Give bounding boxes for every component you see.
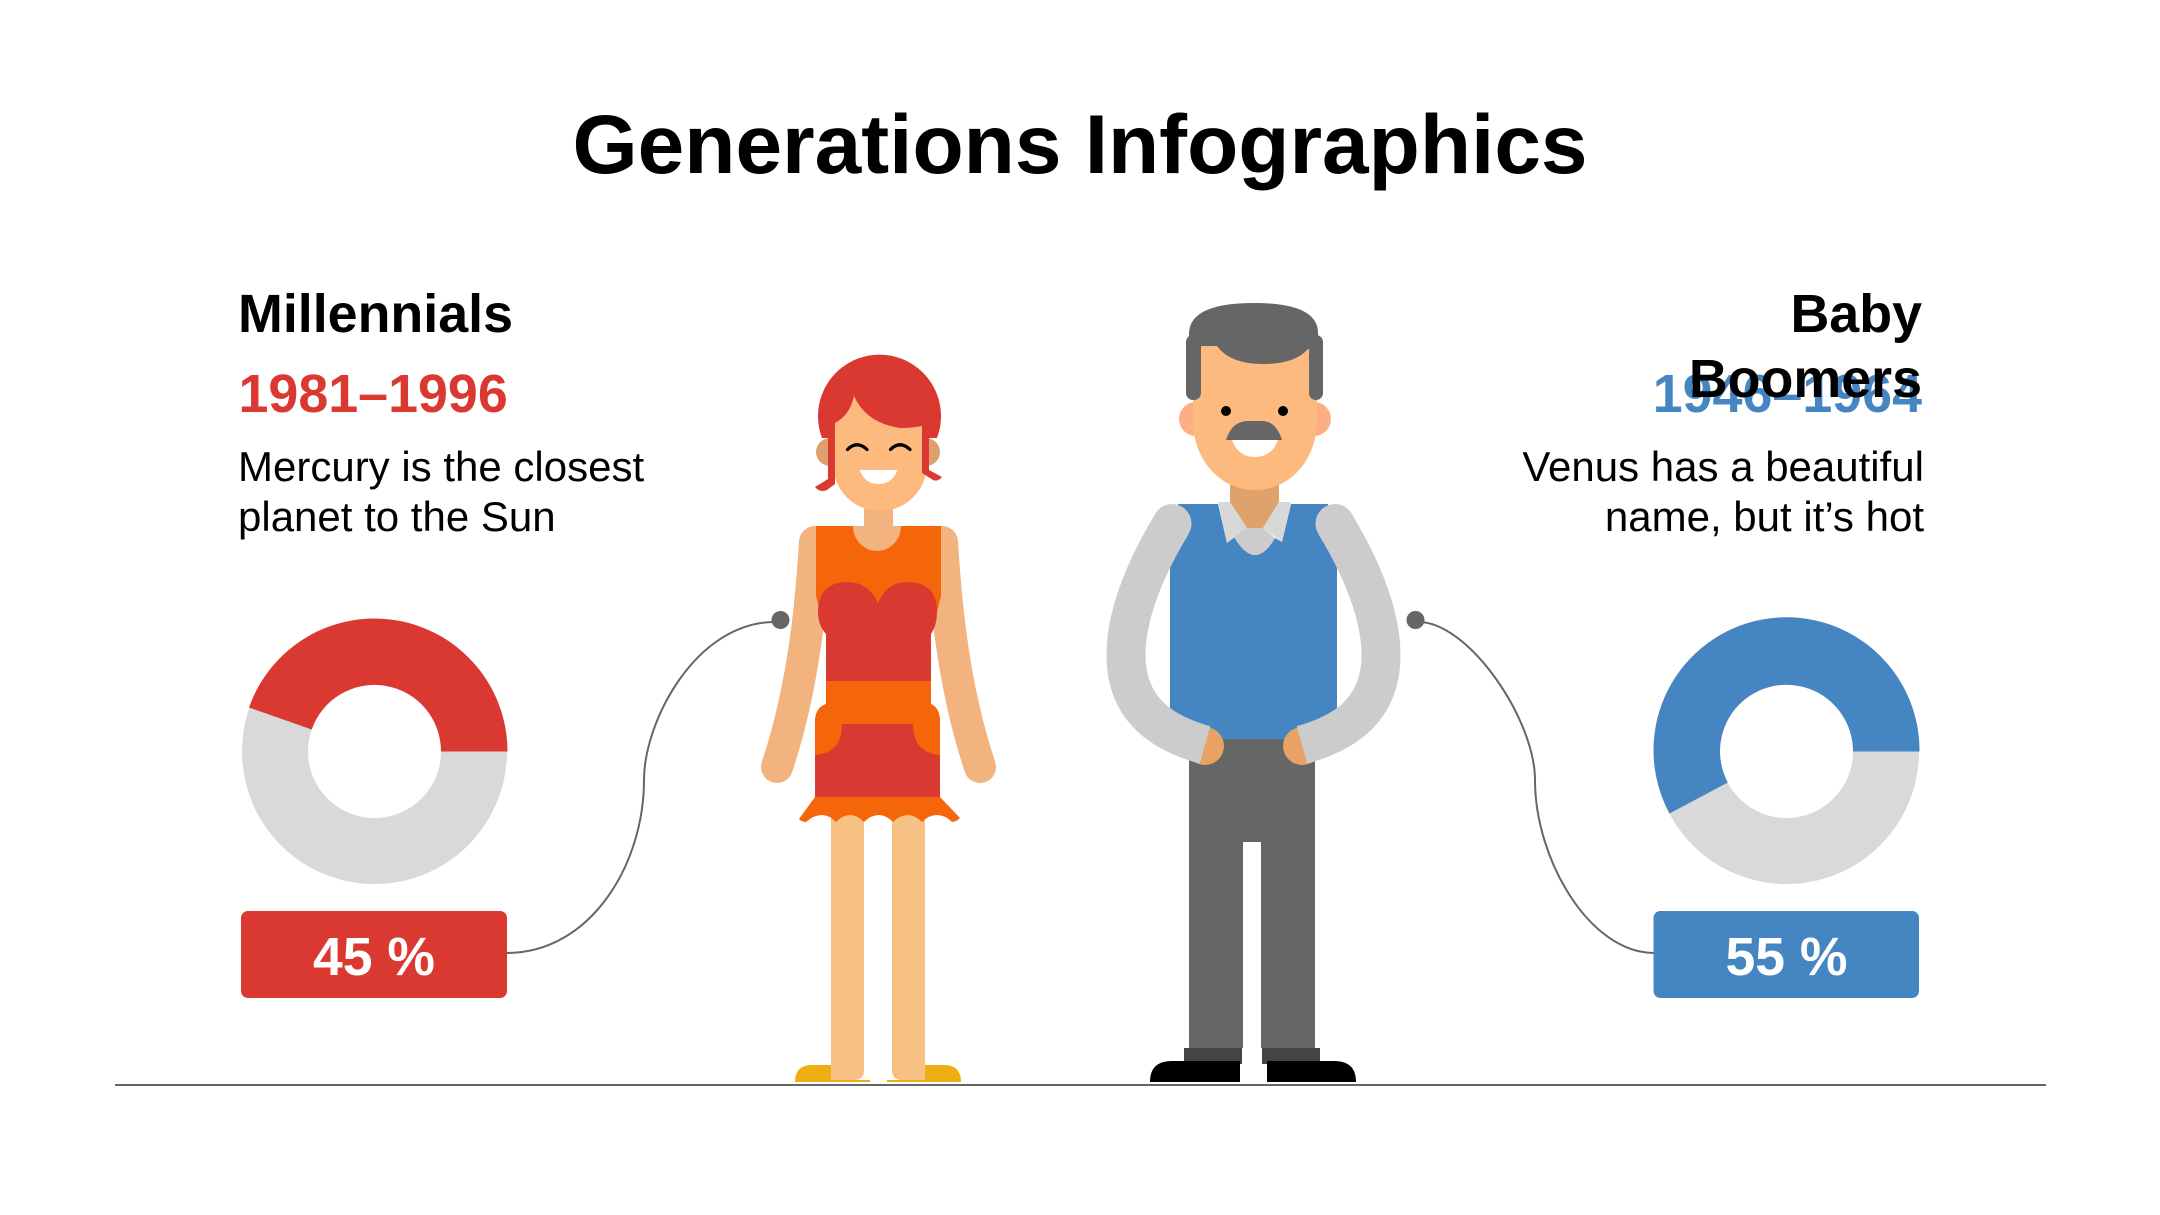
badge: 55 % [1654,911,1919,998]
donut chart: millennials 45% [249,619,508,851]
badge: 45 % [241,911,507,998]
connector: millennials [507,611,790,953]
dress [799,526,960,822]
arms [1126,504,1381,745]
hands [1186,727,1321,765]
trousers [1189,735,1315,1048]
description: Venus: name, but it’s hot [1605,493,1924,540]
head [815,355,942,511]
badge: 45 %: 45 % [313,928,435,987]
legs [831,815,925,1080]
connector: baby boomers [1406,611,1654,953]
figure: baby boomer man [1126,303,1381,1082]
description: Mercury: planet to the Sun [238,493,556,540]
arms [777,542,980,767]
donut chart: baby boomers 55% [1654,617,1920,851]
panel: millennials text [238,284,644,540]
heading: Baby Boomers: Baby [1790,284,1922,344]
trouser cuffs [1184,1048,1320,1064]
description: Mercury: Mercury is the closest [238,443,644,490]
neck [1230,480,1279,528]
figure: millennial woman [777,355,980,1082]
badge: 55 %: 55 % [1726,928,1847,987]
title: Generations Infographics [572,97,1588,191]
neck [864,500,893,535]
years: 1946–1964: 1946–1964 [1653,364,1922,424]
heading: Millennials: Millennials [238,284,513,344]
collar [1218,502,1291,555]
description: Venus: Venus has a beautiful [1522,443,1924,490]
years: 1981–1996: 1981–1996 [238,364,508,424]
head [1179,303,1331,490]
vest [1170,504,1337,739]
ground line [115,1084,2046,1086]
panel: baby boomers text [1522,284,1924,540]
shoes [1150,1061,1356,1082]
heading: Baby Boomers: Boomers [1689,349,1922,409]
shoes [795,1065,961,1082]
